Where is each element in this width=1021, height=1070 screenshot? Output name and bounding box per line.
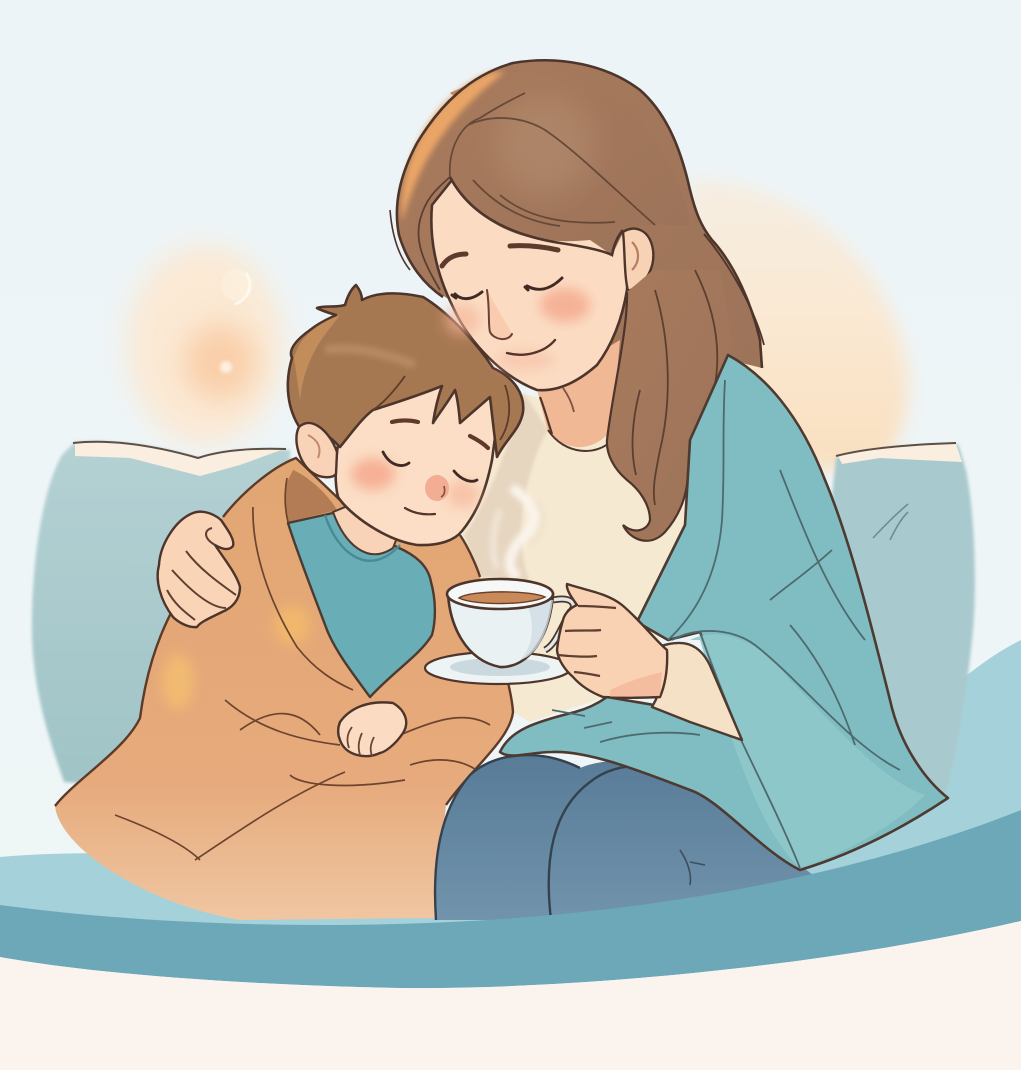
woman: side hair xyxy=(607,270,735,541)
woman: hand on child's shoulder xyxy=(158,512,240,627)
shirt shadow and neck xyxy=(464,340,620,582)
child: orange blanket xyxy=(55,458,513,920)
teacup xyxy=(447,579,573,667)
woman: ear xyxy=(623,229,653,291)
saucer xyxy=(425,652,571,684)
cream bottom band xyxy=(0,921,1021,1070)
child: hand xyxy=(338,702,406,756)
steam xyxy=(493,490,543,575)
woman: front hair xyxy=(397,60,762,368)
child: teal shirt xyxy=(288,505,435,697)
woman: eyebrows xyxy=(442,246,558,266)
woman: face xyxy=(431,170,630,390)
woman: back hair xyxy=(390,60,764,440)
dark teal foreground wave xyxy=(0,810,1021,988)
left warm glow xyxy=(127,245,283,445)
woman: nose xyxy=(487,290,512,339)
woman: cream shirt xyxy=(462,393,692,722)
child: head xyxy=(336,370,500,545)
woman: jeans xyxy=(435,755,820,920)
woman: cream cuff xyxy=(652,643,742,740)
child: eyebrows xyxy=(392,420,488,448)
child: nose xyxy=(425,475,449,501)
tea surface xyxy=(459,592,545,604)
light teal background wave xyxy=(0,640,1021,960)
child: ear xyxy=(296,423,337,477)
woman: hand holding cup xyxy=(557,584,667,698)
sofa: left cushion xyxy=(32,441,300,800)
woman: closed eyes xyxy=(452,278,562,299)
right warm glow xyxy=(690,178,909,470)
child: smile xyxy=(405,508,435,514)
child: closed eyes xyxy=(383,452,477,481)
sofa: right cushion xyxy=(800,443,975,800)
woman: smile xyxy=(507,340,555,355)
child: hair xyxy=(288,285,523,457)
woman: teal shawl xyxy=(500,355,948,870)
